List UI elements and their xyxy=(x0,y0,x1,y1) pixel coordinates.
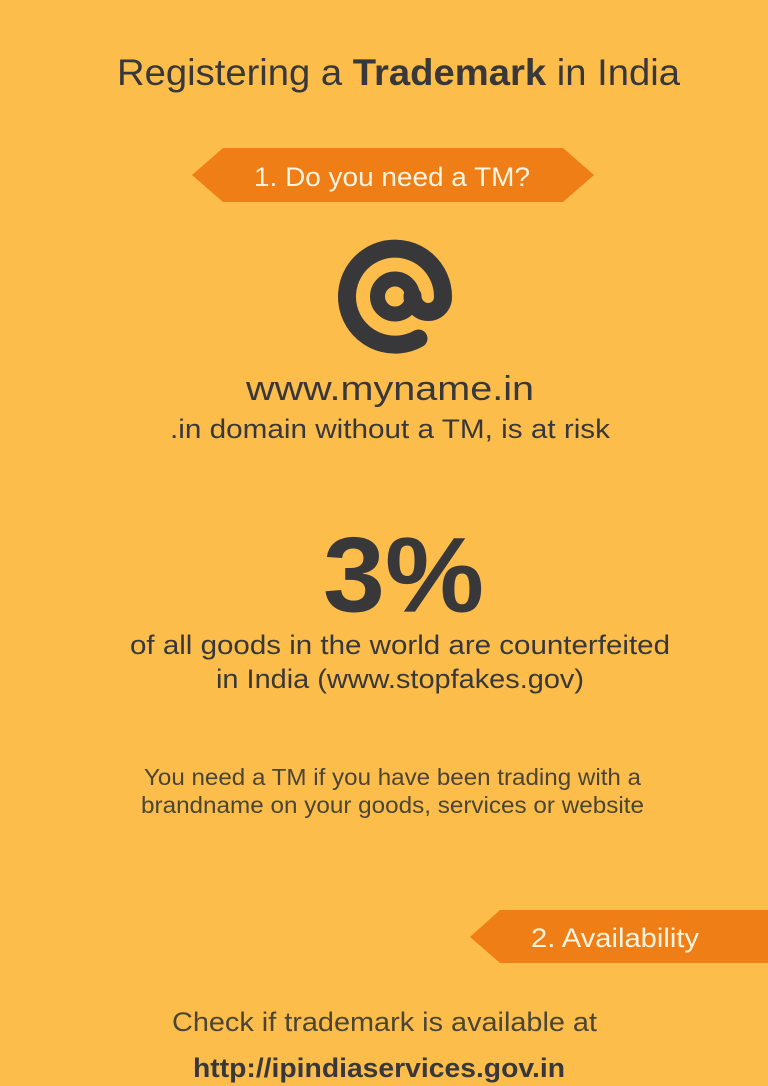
counterfeit text: in India (www.stopfakes.gov) xyxy=(216,664,584,694)
banner: 2. Availability xyxy=(470,910,768,963)
availability text: Check if trademark is available at xyxy=(172,1007,598,1037)
need a TM text: brandname on your goods, services or website xyxy=(141,792,644,818)
statistic: 3%: 3% xyxy=(323,514,484,634)
need a TM text xyxy=(141,764,644,818)
title: Registering a Trademark in India xyxy=(117,52,680,93)
counterfeit text xyxy=(130,630,670,694)
availability text: http://ipindiaservices.gov.in xyxy=(193,1053,565,1083)
banner: 2. Availability: 2. Availability xyxy=(531,923,700,953)
banner: 1. Do you need a TM? xyxy=(192,148,594,202)
availability text xyxy=(172,1007,598,1083)
counterfeit text: of all goods in the world are counterfeited xyxy=(130,630,670,660)
domain text: www.myname.in xyxy=(245,370,534,408)
need a TM text: You need a TM if you have been trading with a xyxy=(144,764,641,790)
icon: at sign xyxy=(347,249,443,345)
banner: 1. Do you need a TM?: 1. Do you need a TM? xyxy=(254,162,530,192)
domain text: .in domain without a TM, is at risk xyxy=(170,414,611,444)
domain text xyxy=(170,370,611,444)
